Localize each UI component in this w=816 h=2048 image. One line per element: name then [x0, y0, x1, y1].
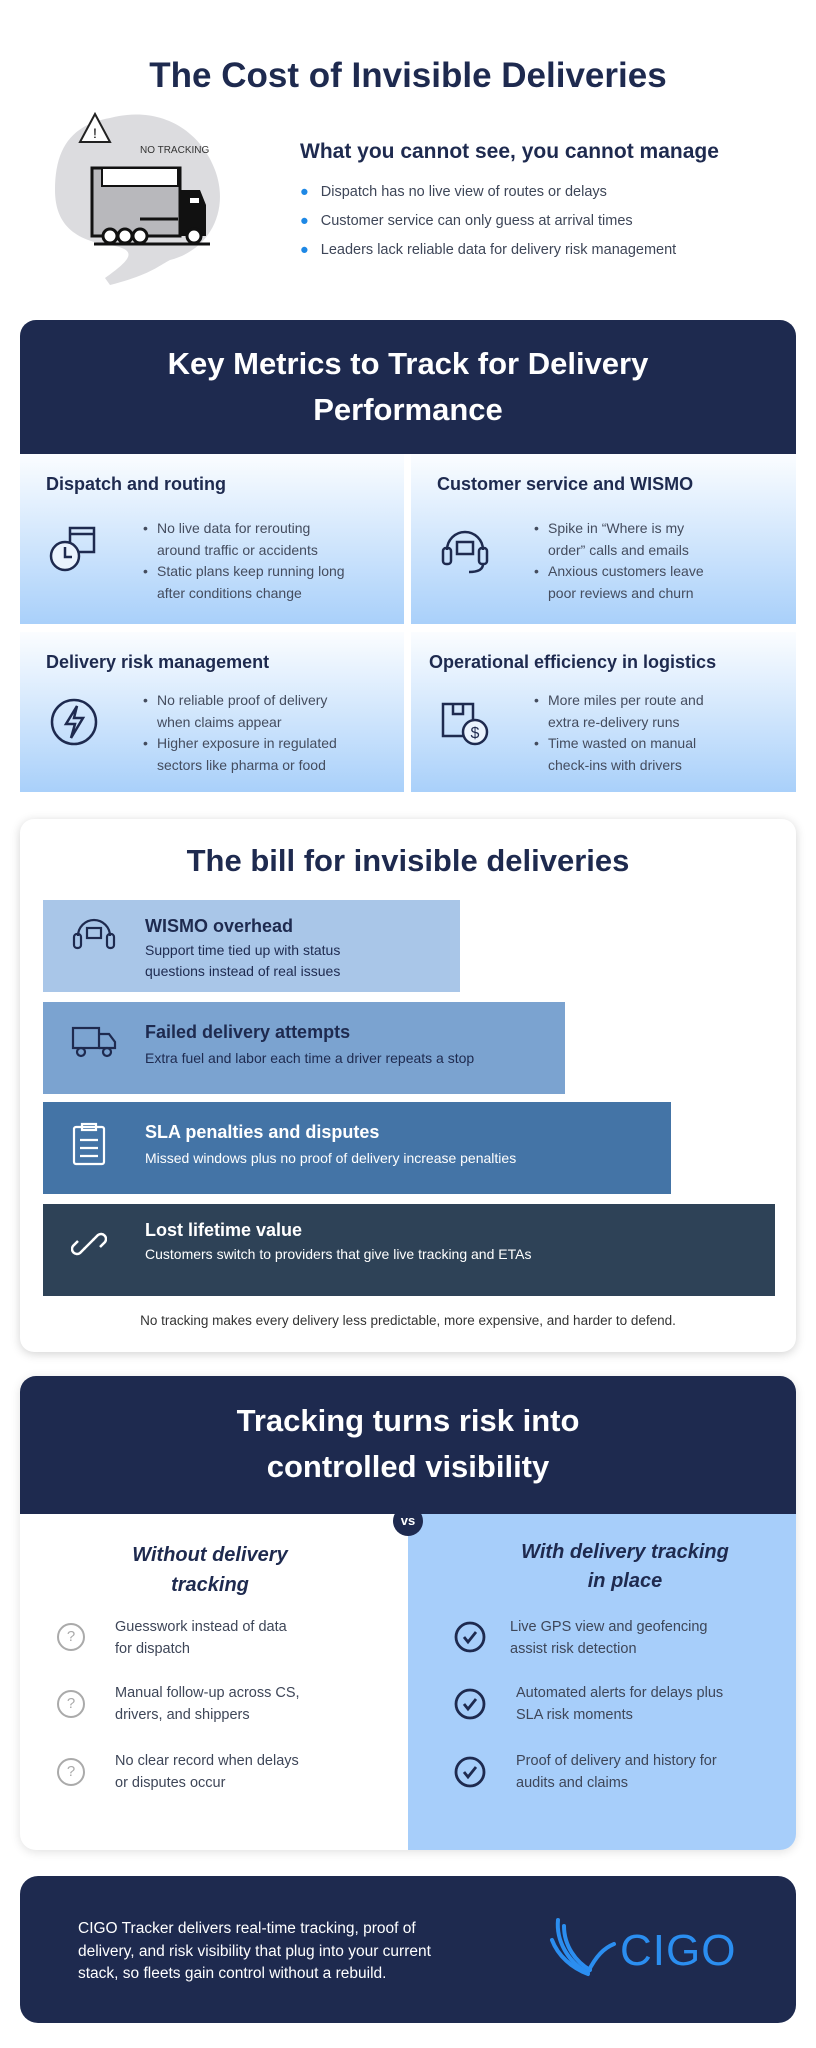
panel: comparison	[20, 1376, 796, 1850]
card: risk	[20, 632, 404, 792]
bar: lifetime value	[43, 1204, 775, 1296]
card: risk: Delivery risk management	[46, 652, 269, 672]
footer text: delivery, and risk visibility that plug into your current	[78, 1942, 431, 1960]
title: The Cost of Invisible Deliveries	[149, 56, 667, 95]
card: dispatch	[20, 454, 404, 624]
panel: the bill	[20, 819, 796, 1352]
bar: failed delivery: Extra fuel and labor each time a driver repeats a stop	[145, 1050, 474, 1066]
heading: with: in place	[588, 1570, 662, 1592]
column: with tracking background	[408, 1514, 796, 1850]
illustration: truck with no tracking: !	[93, 125, 97, 141]
icon: lightning circle	[50, 698, 98, 746]
bar: failed delivery: Failed delivery attempts	[145, 1022, 350, 1042]
heading: without	[132, 1544, 288, 1596]
footer text: stack, so fleets gain control without a rebuild.	[78, 1965, 386, 1982]
logo: CIGO: CIGO	[620, 1926, 736, 1975]
bar: WISMO	[43, 900, 460, 992]
items: with: audits and claims	[516, 1775, 628, 1791]
card: efficiency: check-ins with drivers	[548, 756, 682, 772]
intro text block: ● Customer service can only guess at arrival times	[300, 213, 633, 229]
items: without: Manual follow-up across CS,	[115, 1685, 300, 1701]
heading: key metrics: Key Metrics to Track for Delivery	[168, 346, 648, 381]
heading: key metrics	[20, 320, 796, 454]
bar: WISMO: WISMO overhead	[145, 916, 293, 936]
illustration: truck with no tracking	[55, 112, 220, 285]
card: dispatch: Dispatch and routing	[46, 474, 226, 494]
heading: tracking turns risk: controlled visibility	[267, 1449, 549, 1484]
card: dispatch: after conditions change	[157, 584, 302, 600]
heading: bill: The bill for invisible deliveries	[187, 843, 629, 878]
bar: SLA: SLA penalties and disputes	[145, 1122, 379, 1142]
items: with: Automated alerts for delays plus	[516, 1685, 723, 1701]
card: efficiency: extra re-delivery runs	[548, 714, 680, 730]
card: risk: No reliable proof of delivery	[157, 692, 327, 708]
heading: without: Without delivery	[132, 1544, 288, 1566]
icon: box dollar: $	[471, 725, 480, 742]
bar: lifetime value: Lost lifetime value	[145, 1220, 302, 1240]
card: customer service: poor reviews and churn	[548, 584, 694, 600]
items: without: Guesswork instead of data	[115, 1619, 287, 1635]
intro text block: ● Dispatch has no live view of routes or delays	[300, 184, 607, 200]
items: with: assist risk detection	[510, 1641, 637, 1657]
icon: headset	[442, 530, 488, 574]
icon: clock calendar	[50, 526, 96, 572]
logo: CIGO	[550, 1918, 736, 1976]
heading: tracking turns risk	[20, 1376, 796, 1514]
items: without: or disputes occur	[115, 1775, 225, 1791]
card: efficiency: More miles per route and	[548, 692, 704, 708]
footnote: No tracking makes every delivery less predictable, more expensive, and harder to defend.	[140, 1313, 676, 1328]
items: without: ?	[67, 1628, 75, 1645]
footer text	[78, 1920, 431, 1982]
bar: SLA: Missed windows plus no proof of delivery increase penalties	[145, 1150, 516, 1166]
card: risk: sectors like pharma or food	[157, 756, 326, 772]
vs badge	[393, 1506, 423, 1536]
card: customer service: Spike in “Where is my	[548, 520, 684, 536]
vs badge: vs	[401, 1513, 415, 1528]
card: efficiency: Operational efficiency in logistics	[429, 652, 716, 672]
footer: CIGO	[20, 1876, 796, 2023]
bar: WISMO: Support time tied up with status	[145, 942, 340, 958]
bar: lifetime value: Customers switch to providers that give live tracking and ETAs	[145, 1246, 531, 1262]
card: customer service: order” calls and emails	[548, 542, 689, 558]
card: risk: when claims appear	[157, 714, 282, 730]
card: dispatch: Static plans keep running long	[157, 563, 345, 579]
items: without: for dispatch	[115, 1641, 190, 1657]
heading: without: tracking	[171, 1574, 249, 1596]
heading: with: With delivery tracking	[521, 1541, 729, 1563]
panel: key metrics	[20, 320, 796, 792]
items: with: Proof of delivery and history for	[516, 1753, 717, 1769]
items: without	[57, 1619, 300, 1791]
bar: WISMO: questions instead of real issues	[145, 963, 340, 979]
items: without: ?	[67, 1763, 75, 1780]
items: without: No clear record when delays	[115, 1753, 299, 1769]
items: without: ?	[67, 1695, 75, 1712]
card: dispatch: No live data for rerouting	[157, 520, 310, 536]
icon: box dollar	[442, 702, 488, 746]
card: customer service: Anxious customers leave	[548, 563, 704, 579]
heading: key metrics: Performance	[313, 392, 503, 427]
footer text: CIGO Tracker delivers real-time tracking, proof of	[78, 1920, 416, 1937]
card: efficiency: Time wasted on manual	[548, 735, 696, 751]
card: efficiency	[411, 632, 796, 792]
items: with: Live GPS view and geofencing	[510, 1619, 708, 1635]
card: risk: Higher exposure in regulated	[157, 735, 337, 751]
heading: with	[521, 1541, 729, 1592]
card: dispatch: around traffic or accidents	[157, 542, 318, 558]
card: customer service	[411, 454, 796, 624]
bar: failed delivery	[43, 1002, 565, 1094]
illustration: truck with no tracking: NO TRACKING	[140, 145, 209, 156]
intro text block	[300, 140, 719, 258]
items: with: SLA risk moments	[516, 1707, 633, 1723]
bar: SLA	[43, 1102, 671, 1194]
intro text block: ● Leaders lack reliable data for delivery risk management	[300, 242, 676, 258]
items: without: drivers, and shippers	[115, 1707, 250, 1723]
heading: tracking turns risk: Tracking turns risk into	[237, 1403, 579, 1438]
intro text block: What you cannot see, you cannot manage	[300, 140, 719, 163]
card: customer service: Customer service and WISMO	[437, 474, 693, 494]
items: with	[454, 1619, 723, 1791]
